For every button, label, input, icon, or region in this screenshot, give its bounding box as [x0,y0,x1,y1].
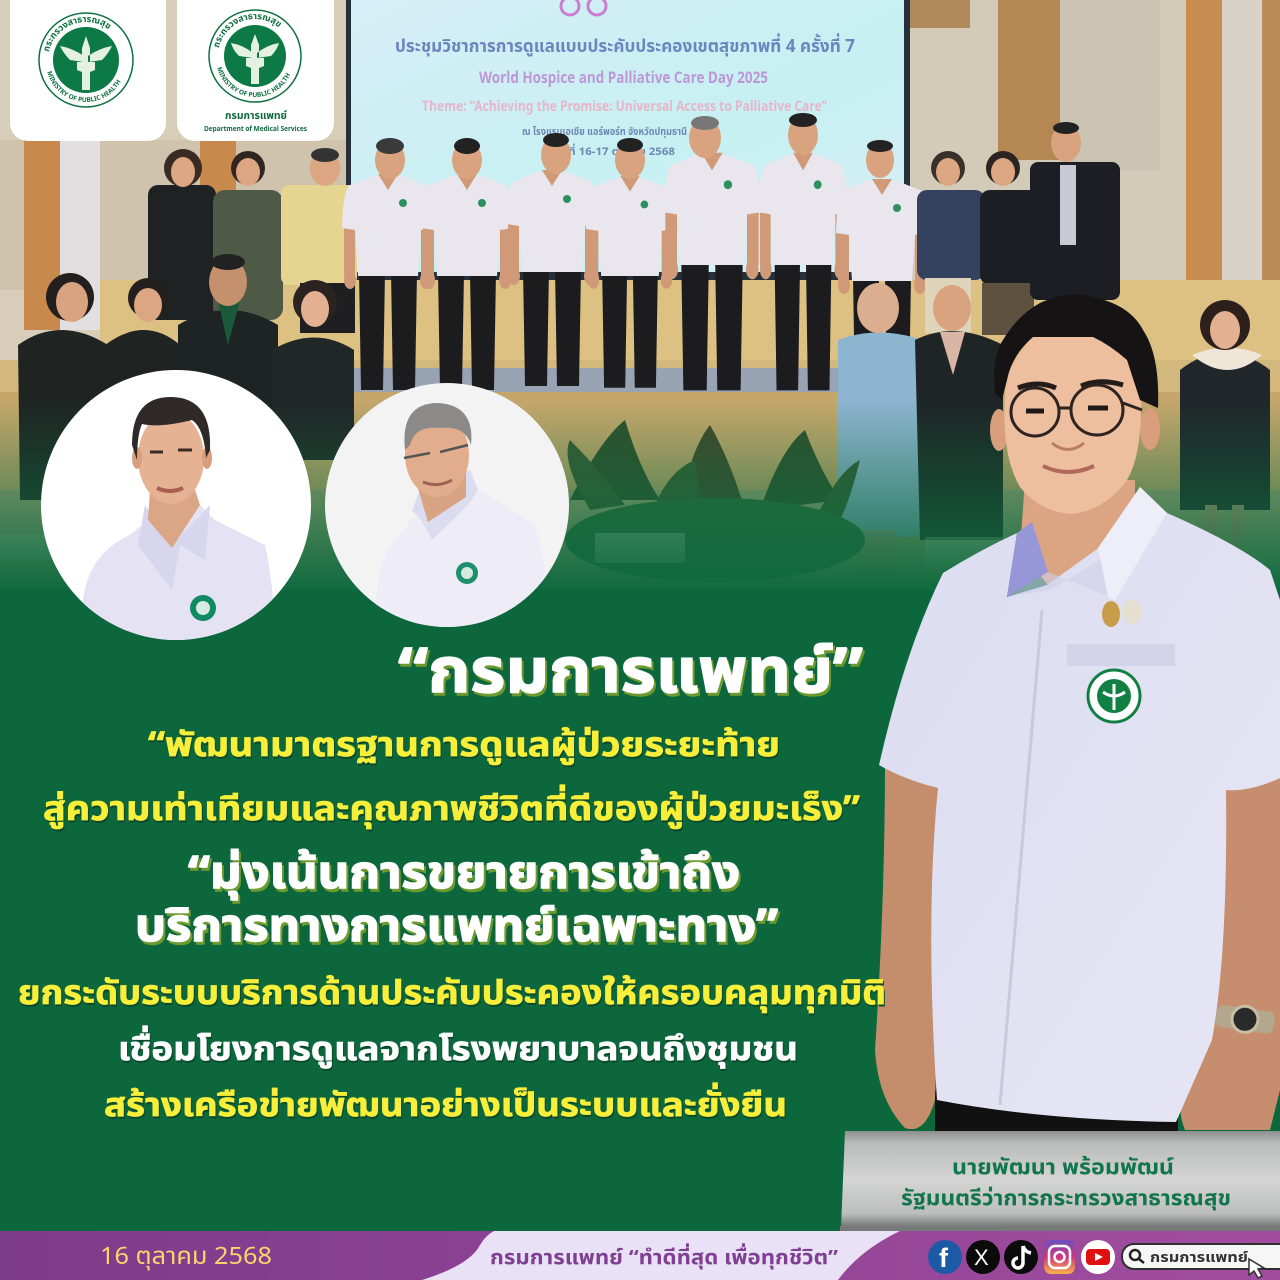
portrait circle: executive 1 [41,370,311,650]
icon: youtube [1081,1240,1115,1274]
left collar flap [1007,560,1110,597]
watch [1214,1002,1276,1036]
ears [990,409,1008,451]
minister portrait [875,295,1280,1135]
logo card: Department of Medical Services: กระทรวงสาธารณสุข [214,14,282,48]
inner collar [1007,522,1048,597]
white heading line 1: “มุ่งเน้นการขยายการเข้าถึง [188,841,740,909]
shirt pins [1102,601,1120,627]
pocket flap [1067,644,1175,666]
back row of standing participants [148,113,1120,395]
logo card: Ministry of Public Health: MINISTRY OF PUBLIC HEALTH [47,71,121,102]
right collar flap [1098,487,1167,600]
green main panel [0,590,1280,1232]
right arm [1180,770,1280,1130]
hair [994,295,1158,408]
projection screen: ณ โรงแรมเอเชีย แอร์พอร์ท จังหวัดปทุมธานี [522,123,687,140]
body line 2: เชื่อมโยงการดูแลจากโรงพยาบาลจนถึงชุมชน [118,1025,798,1075]
projection screen: World Hospice and Palliative Care Day 2025 [479,67,768,91]
icon: cursor [1249,1259,1264,1278]
icon: X [966,1240,1000,1274]
projection screen: วันที่ 16-17 ตุลาคม 2568 [555,143,675,160]
icon: tiktok [1004,1240,1038,1274]
icon: facebook: f [939,1243,949,1273]
trousers [935,1090,1178,1135]
potted plants below stage [565,420,865,582]
subheading yellow line 1: “พัฒนามาตรฐานการดูแลผู้ป่วยระยะท้าย [148,721,780,772]
department name: กรมการแพทย์ [225,107,287,124]
eyebrows and eyes [1018,382,1123,388]
shirt placket [1000,610,1042,1105]
green fade overlay [0,400,1280,592]
headline: department name: “กรมการแพทย์” [398,626,863,720]
logo card: Ministry of Public Health [10,0,166,141]
date: 16 ตุลาคม 2568 [100,1239,272,1275]
logo card: Department of Medical Services [177,0,334,141]
minister position: รัฐมนตรีว่าการกระทรวงสาธารณสุข [901,1184,1231,1215]
shirt emblem [1088,670,1140,722]
white heading line 2: บริการทางการแพทย์เฉพาะทาง” [135,894,778,962]
portrait circle: executive 2 [325,383,569,640]
slogan: กรมการแพทย์ “ทำดีที่สุด เพื่อทุกชีวิต” [490,1243,838,1273]
projection screen [346,0,910,280]
minister nameplate [840,1131,1280,1231]
body line 1: ยกระดับระบบบริการด้านประคับประคองให้ครอบคลุมทุกมิติ [18,969,886,1020]
photo background: conference room [0,0,1280,600]
neck [1020,480,1135,590]
bottom bar [0,1231,1280,1280]
icon: facebook [928,1240,962,1274]
front row of participants [18,254,1270,586]
glasses [1011,385,1142,436]
icon: instagram [1044,1240,1075,1274]
shirt [879,487,1280,1122]
search box [1122,1244,1280,1269]
logo card: Ministry of Public Health: กระทรวงสาธารณสุข [44,17,111,52]
table cloths in front [0,533,1015,567]
search box: กรมการแพทย์ [1150,1248,1248,1269]
shirt badge [456,562,478,584]
subheading yellow line 2: สู่ความเท่าเทียมและคุณภาพชีวิตที่ดีของผู้ป่วยมะเร็ง” [43,784,860,836]
icon: X: X [974,1245,989,1270]
body line 3: สร้างเครือข่ายพัฒนาอย่างเป็นระบบและยั่งยืน [104,1081,787,1131]
left arm [875,760,940,1129]
logo card: Department of Medical Services: MINISTRY OF PUBLIC HEALTH [217,66,290,98]
projection screen: Theme: “Achieving the Promise: Universal Access to Palliative Care” [422,97,828,118]
logo card: Department of Medical Services: Department of Medical Services [204,124,307,135]
minister name: นายพัฒนา พร้อมพัฒน์ [952,1153,1174,1184]
nose and mouth [1052,443,1084,450]
screen heading: ประชุมวิชาการการดูแลแบบประคับประคองเขตสุขภาพที่ 4 ครั้งที่ 7 [395,33,855,61]
face [1004,325,1141,514]
shirt badge [190,595,216,621]
